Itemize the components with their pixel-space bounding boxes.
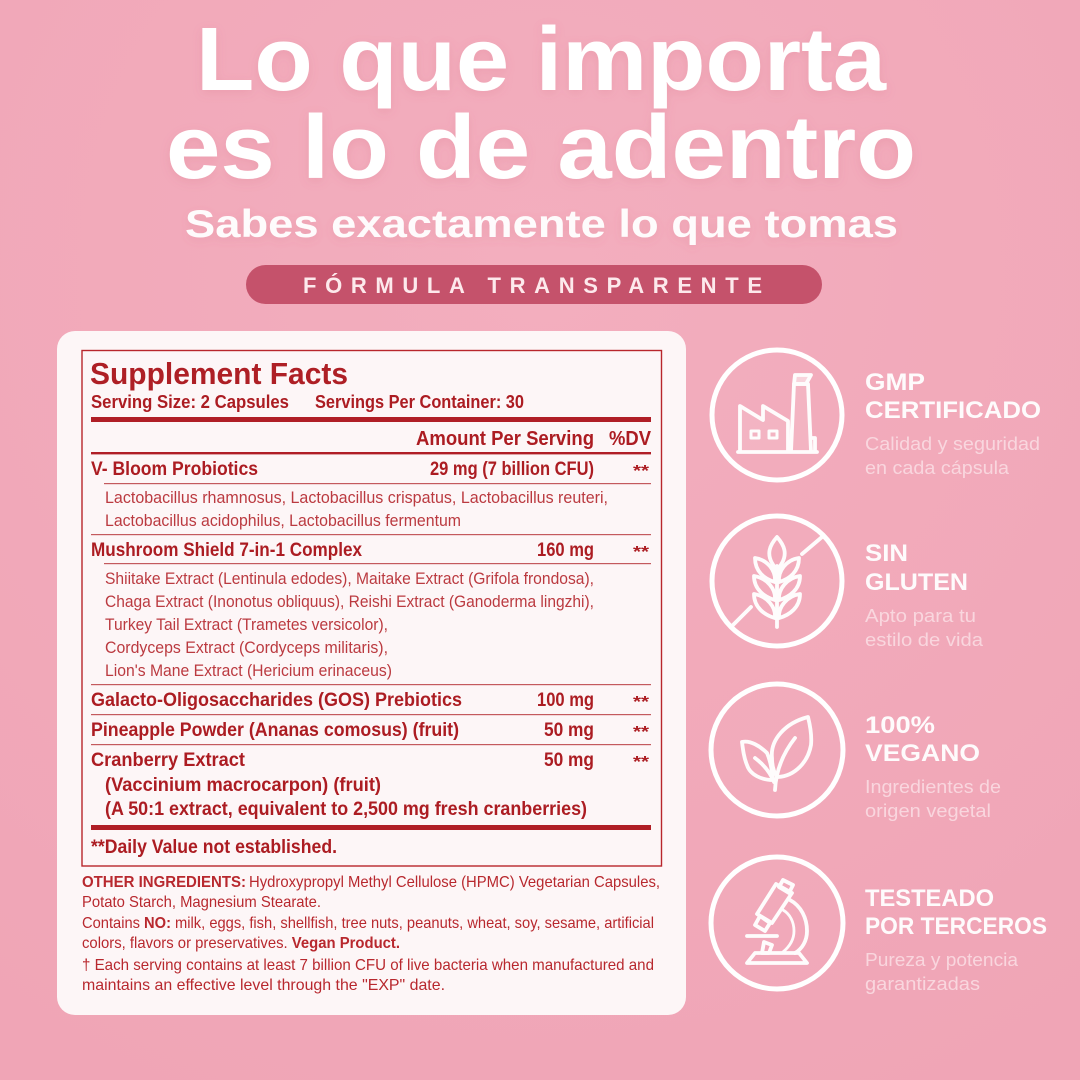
icon: microscope (711, 857, 843, 989)
row: GOS prebiotics: 100 mg (537, 689, 594, 711)
row: pineapple powder: Pineapple Powder (Ananas comosus) (fruit) (91, 719, 459, 741)
title (166, 10, 916, 198)
row: Mushroom Shield complex: ** (633, 544, 650, 561)
heading (865, 540, 968, 596)
heading: GLUTEN (865, 569, 968, 596)
row: V-Bloom Probiotics: V- Bloom Probiotics (91, 458, 258, 480)
description: estilo de vida (865, 629, 984, 650)
heading: CERTIFICADO (865, 397, 1041, 424)
heading: SIN (865, 540, 908, 567)
row: GOS prebiotics: ** (633, 694, 650, 711)
heading (865, 885, 1047, 940)
row: pineapple powder: 50 mg (544, 719, 594, 741)
heading: VEGANO (865, 740, 980, 767)
description: Pureza y potencia (865, 949, 1019, 970)
table heading: Supplement Facts (90, 356, 348, 391)
heading (865, 712, 980, 767)
description: garantizadas (865, 973, 980, 994)
row: cranberry extract: Cranberry Extract (91, 749, 245, 771)
icon: crossed wheat (712, 516, 842, 646)
badge: fórmula transparente (246, 265, 822, 304)
description (865, 949, 1019, 994)
description: Apto para tu (865, 605, 976, 626)
description: en cada cápsula (865, 457, 1010, 478)
row: Mushroom Shield complex: Lion's Mane Extract (Hericium erinaceus) (105, 661, 392, 680)
title: Lo que importa (196, 10, 887, 110)
row: V-Bloom Probiotics: Lactobacillus acidophilus, Lactobacillus fermentum (105, 511, 461, 530)
row: cranberry extract: (Vaccinium macrocarpon) (fruit) (105, 774, 381, 796)
row: Mushroom Shield complex: Cordyceps Extract (Cordyceps militaris), (105, 638, 388, 657)
row: V-Bloom Probiotics (91, 458, 651, 530)
row: cranberry extract: (A 50:1 extract, equivalent to 2,500 mg fresh cranberries) (105, 798, 587, 820)
heading: 100% (865, 712, 935, 739)
other ingredients text (82, 874, 660, 994)
row: cranberry extract: 50 mg (544, 749, 594, 771)
serving information: Serving Size: 2 Capsules (91, 391, 289, 412)
row: Mushroom Shield complex: Chaga Extract (Inonotus obliquus), Reishi Extract (Ganoderma lingzhi), (105, 592, 594, 611)
other ingredients text: † Each serving contains at least 7 billion CFU of live bacteria when manufactured and (82, 957, 654, 974)
row: V-Bloom Probiotics: 29 mg (7 billion CFU) (430, 458, 594, 480)
row: pineapple powder: ** (633, 724, 650, 741)
description: Ingredientes de (865, 776, 1001, 797)
heading (865, 369, 1041, 424)
subtitle: Sabes exactamente lo que tomas (185, 203, 898, 246)
other ingredients text: maintains an effective level through the "EXP" date. (82, 977, 445, 994)
other ingredients text: Hydroxypropyl Methyl Cellulose (HPMC) Vegetarian Capsules, (249, 874, 660, 891)
description: origen vegetal (865, 800, 991, 821)
column headers: %DV (609, 427, 651, 450)
heading: POR TERCEROS (865, 913, 1047, 940)
column headers: Amount Per Serving (416, 427, 594, 450)
description: Calidad y seguridad (865, 433, 1040, 454)
other ingredients text: Potato Starch, Magnesium Stearate. (82, 894, 321, 911)
row: Mushroom Shield complex: 160 mg (537, 539, 594, 561)
description (865, 433, 1040, 478)
row: Mushroom Shield complex: Shiitake Extract (Lentinula edodes), Maitake Extract (Grifola frondosa), (105, 569, 594, 588)
row: cranberry extract (91, 749, 650, 820)
description (865, 605, 984, 650)
serving information (91, 391, 524, 412)
title: es lo de adentro (166, 98, 916, 198)
other ingredients text: OTHER INGREDIENTS: (82, 874, 246, 891)
serving information: Servings Per Container: 30 (315, 391, 524, 412)
feature: sin gluten (712, 516, 984, 650)
icon: leaves (711, 684, 843, 816)
badge: fórmula transparente: FÓRMULA TRANSPARENTE (303, 273, 762, 298)
row: Mushroom Shield complex: Turkey Tail Extract (Trametes versicolor), (105, 615, 388, 634)
daily value footnote: **Daily Value not established. (91, 836, 337, 858)
heading: GMP (865, 369, 925, 396)
other ingredients text: Contains NO: milk, eggs, fish, shellfish, tree nuts, peanuts, wheat, soy, sesame, artificial (82, 915, 654, 932)
feature: 100% vegano (711, 684, 1001, 821)
other ingredients text: colors, flavors or preservatives. Vegan Product. (82, 935, 400, 952)
feature: GMP certificado (712, 350, 1041, 480)
panel: supplement facts card (57, 331, 686, 1015)
row: cranberry extract: ** (633, 754, 650, 771)
supplement facts table (82, 350, 662, 866)
row: Mushroom Shield complex: Mushroom Shield 7-in-1 Complex (91, 539, 362, 561)
icon: factory (712, 350, 842, 480)
row: GOS prebiotics: Galacto-Oligosaccharides (GOS) Prebiotics (91, 689, 462, 711)
heading: TESTEADO (865, 885, 994, 912)
row: V-Bloom Probiotics: Lactobacillus rhamnosus, Lactobacillus crispatus, Lactobacillus reuteri, (105, 488, 608, 507)
row: V-Bloom Probiotics: ** (633, 463, 650, 480)
row: Mushroom Shield complex (91, 539, 651, 680)
description (865, 776, 1001, 821)
feature: testeado por terceros (711, 857, 1047, 994)
